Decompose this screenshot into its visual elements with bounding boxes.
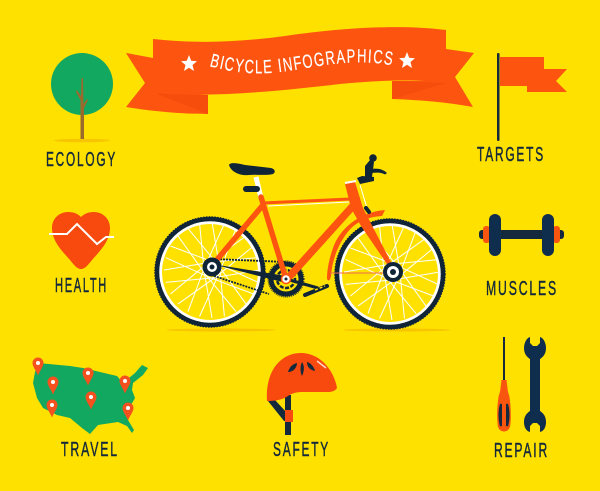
front hub (383, 262, 403, 282)
brake cable (360, 185, 367, 208)
frame (215, 197, 352, 279)
rear wheel (153, 211, 271, 329)
label: travel: TRAVEL (61, 439, 119, 461)
saddle (229, 163, 275, 175)
icon: wrench (524, 337, 546, 432)
chain stay (212, 264, 286, 283)
fender stay (330, 272, 383, 274)
seat collar (243, 186, 260, 192)
top tube highlight (268, 202, 349, 206)
front wheel (333, 213, 451, 331)
wheel shadows (166, 328, 451, 332)
left star (181, 55, 197, 71)
chainring (268, 261, 304, 297)
seat post (256, 177, 261, 198)
icon: screwdriver (497, 337, 511, 432)
label: ecology: ECOLOGY (46, 149, 117, 171)
icon: USA map with pins (32, 358, 148, 434)
rear hub (202, 258, 222, 276)
label: safety: SAFETY (273, 439, 330, 461)
icon: heart with pulse (49, 212, 114, 269)
title ribbon (126, 27, 474, 114)
chain (214, 259, 286, 294)
label: health: HEALTH (55, 275, 108, 297)
title text: BICYCLE INFOGRAPHICS (210, 49, 393, 74)
ribbon right tail (392, 49, 474, 107)
ribbon left tail (126, 53, 208, 114)
crank and pedal (282, 274, 327, 295)
icon: helmet (267, 353, 337, 435)
map pins (32, 358, 134, 420)
right star (399, 52, 415, 68)
icon: tree (51, 53, 113, 142)
bicycle (153, 154, 451, 332)
head tube and fork (345, 182, 392, 267)
icon: flag (497, 53, 567, 141)
stem top (345, 181, 356, 183)
handlebar (357, 154, 387, 184)
fender (327, 210, 385, 280)
ribbon main band (153, 27, 446, 95)
label: repair: REPAIR (494, 440, 549, 462)
icon: dumbbell (479, 214, 564, 256)
label: targets: TARGETS (477, 144, 545, 166)
